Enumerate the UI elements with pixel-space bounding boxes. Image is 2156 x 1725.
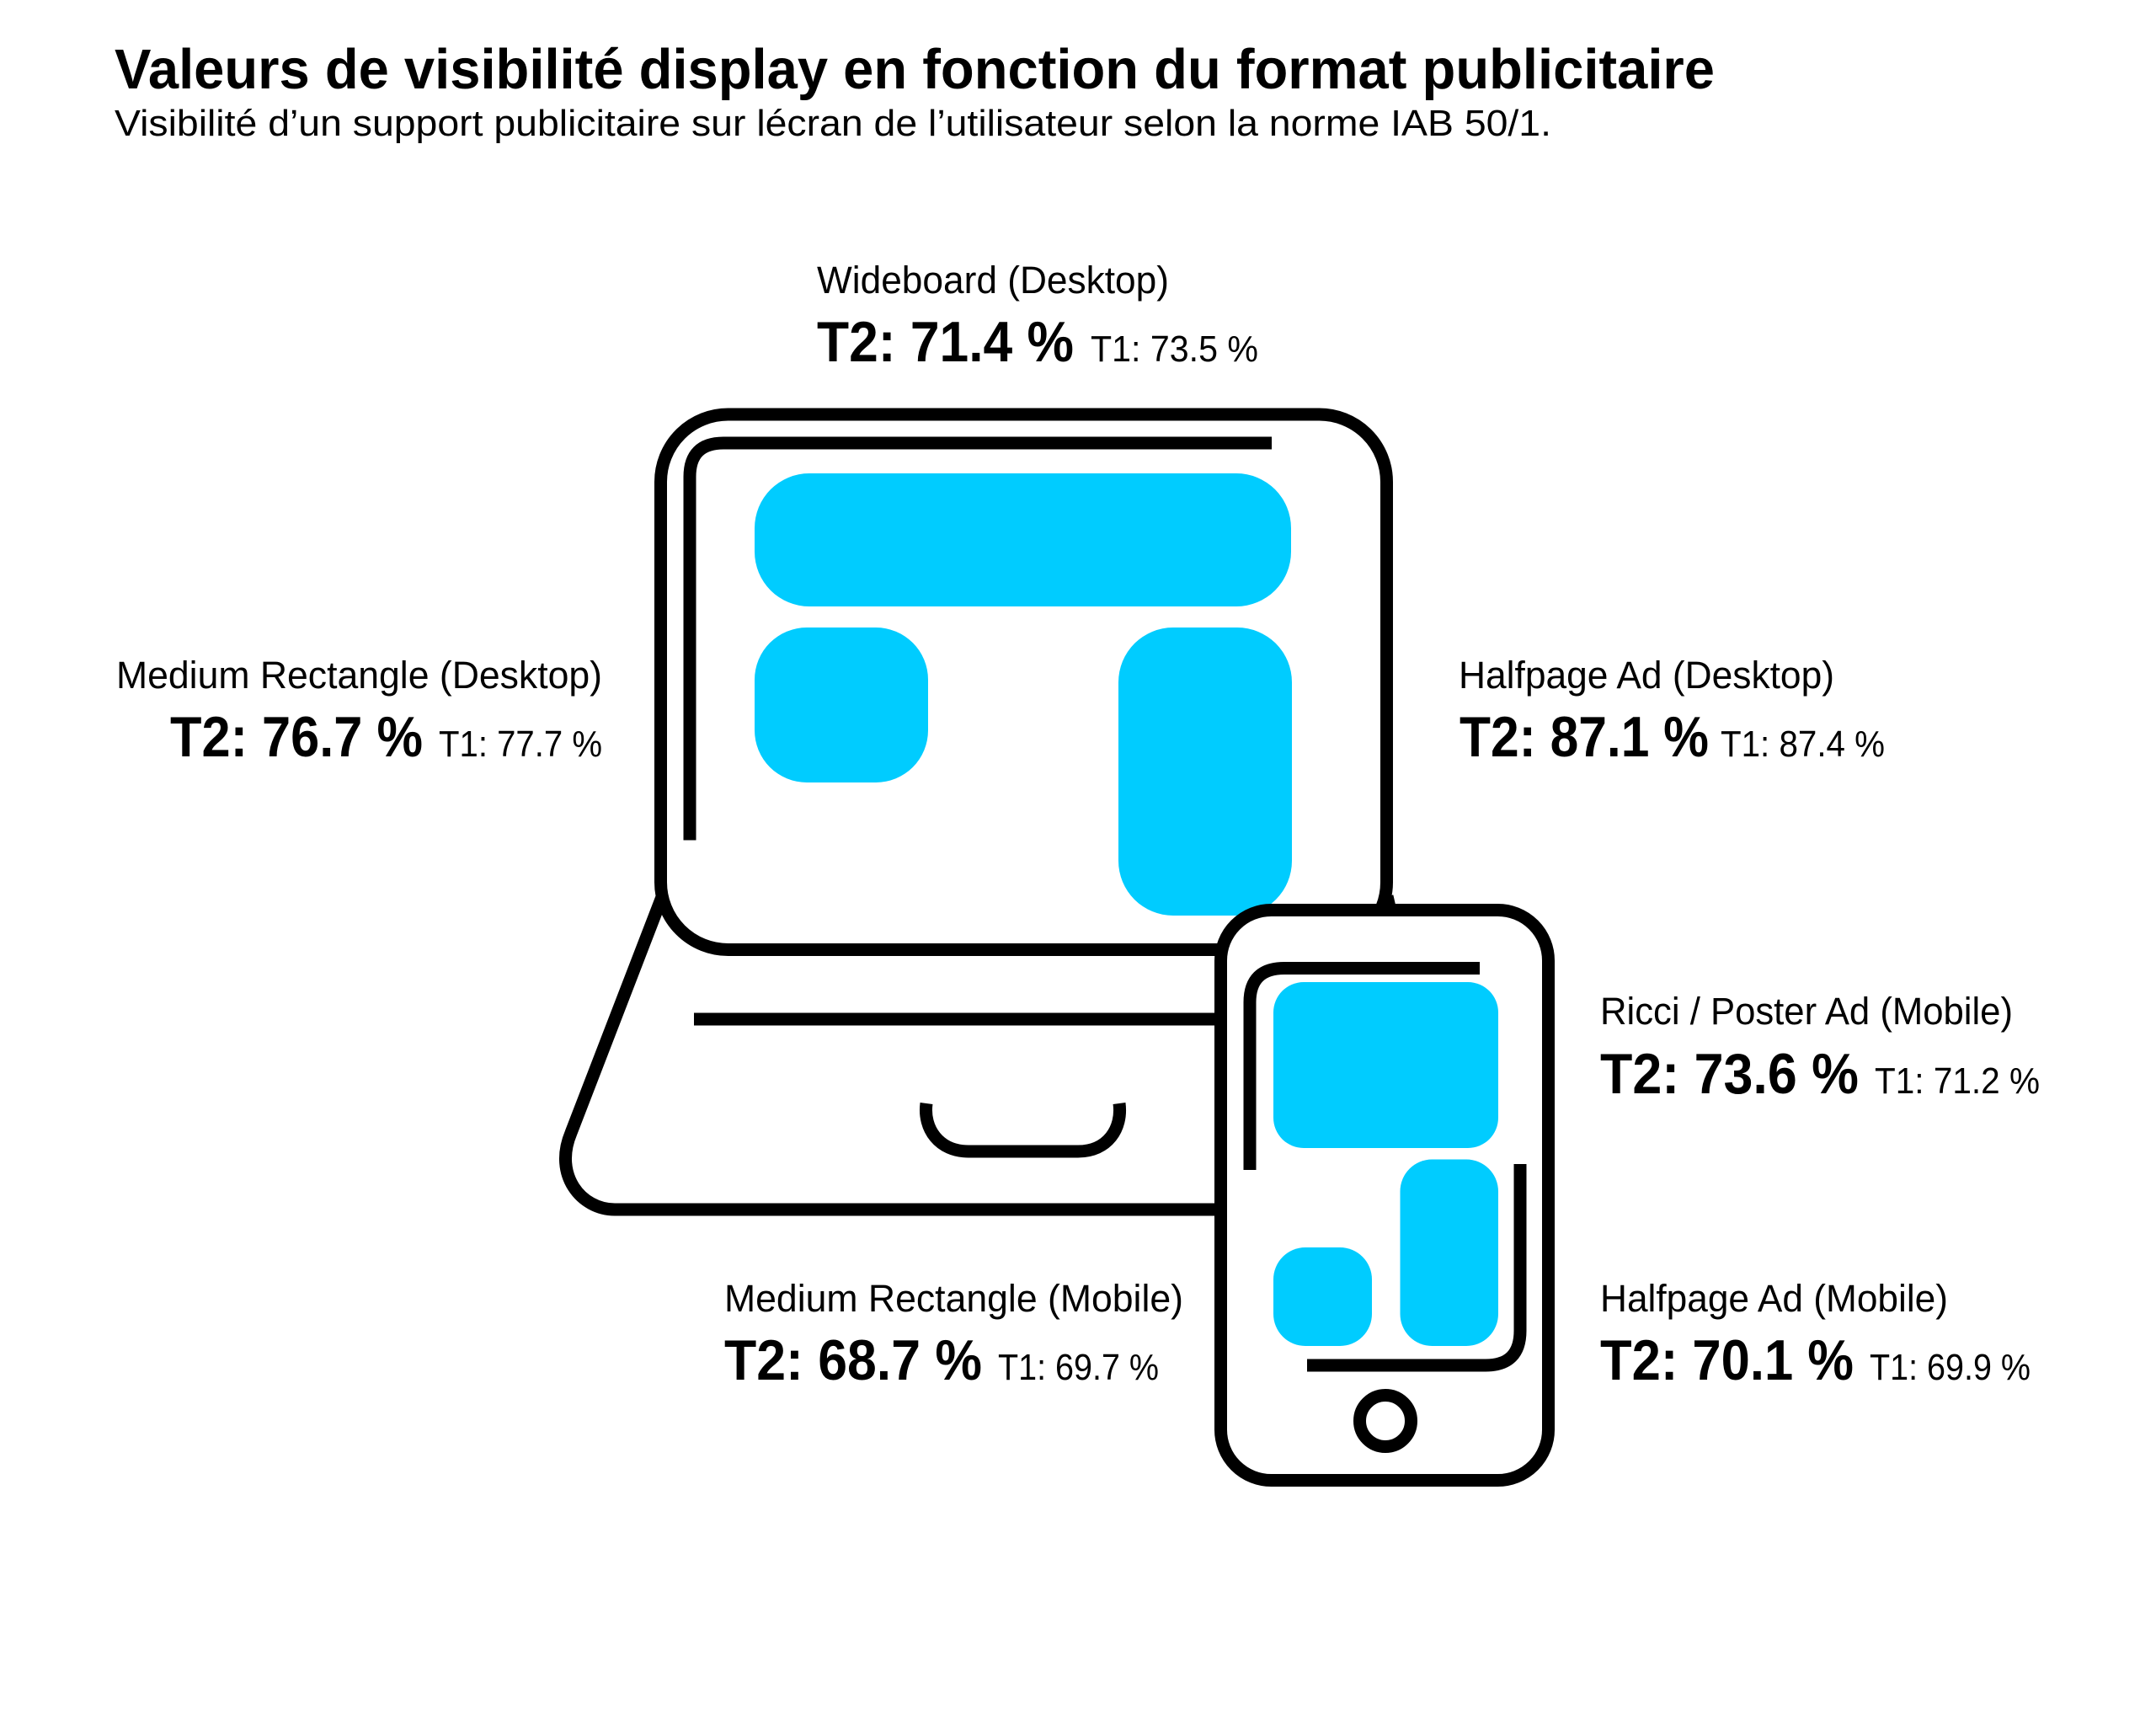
label: ricci poster mobile: T1: 71.2 % [1875, 1060, 2040, 1102]
laptop keyboard line [694, 1012, 1230, 1026]
subtitle: Visibilité d’un support publicitaire sur lécran de l’utilisateur selon la norme IAB 50/1. [115, 103, 1551, 144]
label: halfpage mobile [1600, 1277, 2031, 1392]
label: medium rectangle mobile [724, 1277, 1183, 1392]
icon: smartphone [1221, 910, 1548, 1481]
phone home button [1359, 1395, 1412, 1447]
label: halfpage mobile: Halfpage Ad (Mobile) [1600, 1277, 1948, 1320]
laptop base [565, 897, 1230, 1210]
label: halfpage desktop: T2: 87.1 % [1460, 705, 1709, 769]
label: halfpage desktop: Halfpage Ad (Desktop) [1459, 654, 1834, 697]
label: ricci poster mobile: T2: 73.6 % [1600, 1042, 1859, 1106]
icon: laptop [565, 414, 1392, 1210]
laptop screen highlight line [690, 443, 1272, 841]
label: halfpage desktop: T1: 87.4 % [1721, 724, 1885, 765]
phone highlight line bottom right [1307, 1164, 1520, 1365]
label: halfpage mobile: T1: 69.9 % [1870, 1347, 2031, 1388]
ad: halfpage desktop [1118, 628, 1292, 916]
ad: ricci poster mobile [1273, 982, 1498, 1148]
title: Valeurs de visibilité display en fonction du format publicitaire [115, 38, 1715, 101]
label: wideboard desktop: T2: 71.4 % [817, 310, 1074, 374]
ad: medium rectangle desktop [755, 628, 928, 782]
label: wideboard desktop: Wideboard (Desktop) [817, 259, 1169, 302]
label: medium rectangle desktop: T2: 76.7 % [170, 705, 423, 769]
phone body [1221, 910, 1548, 1481]
ad: wideboard desktop [755, 473, 1291, 606]
label: halfpage desktop [1459, 654, 1885, 769]
label: medium rectangle desktop: T1: 77.7 % [439, 724, 602, 765]
label: medium rectangle mobile: T1: 69.7 % [998, 1347, 1159, 1388]
label: medium rectangle desktop [116, 654, 602, 769]
label: medium rectangle mobile: T2: 68.7 % [724, 1328, 982, 1392]
laptop screen [660, 414, 1386, 950]
label: wideboard desktop [817, 259, 1258, 374]
ad: halfpage mobile [1400, 1159, 1498, 1346]
label: medium rectangle desktop: Medium Rectangle (Desktop) [116, 654, 602, 697]
phone highlight line top left [1250, 969, 1480, 1170]
label: ricci poster mobile [1600, 990, 2040, 1106]
label: medium rectangle mobile: Medium Rectangle (Mobile) [724, 1277, 1183, 1320]
ad: medium rectangle mobile [1273, 1247, 1372, 1346]
laptop right hinge [1387, 896, 1392, 918]
label: wideboard desktop: T1: 73.5 % [1091, 328, 1258, 370]
label: halfpage mobile: T2: 70.1 % [1600, 1328, 1854, 1392]
label: ricci poster mobile: Ricci / Poster Ad (Mobile) [1600, 990, 2013, 1033]
laptop trackpad [926, 1103, 1120, 1151]
